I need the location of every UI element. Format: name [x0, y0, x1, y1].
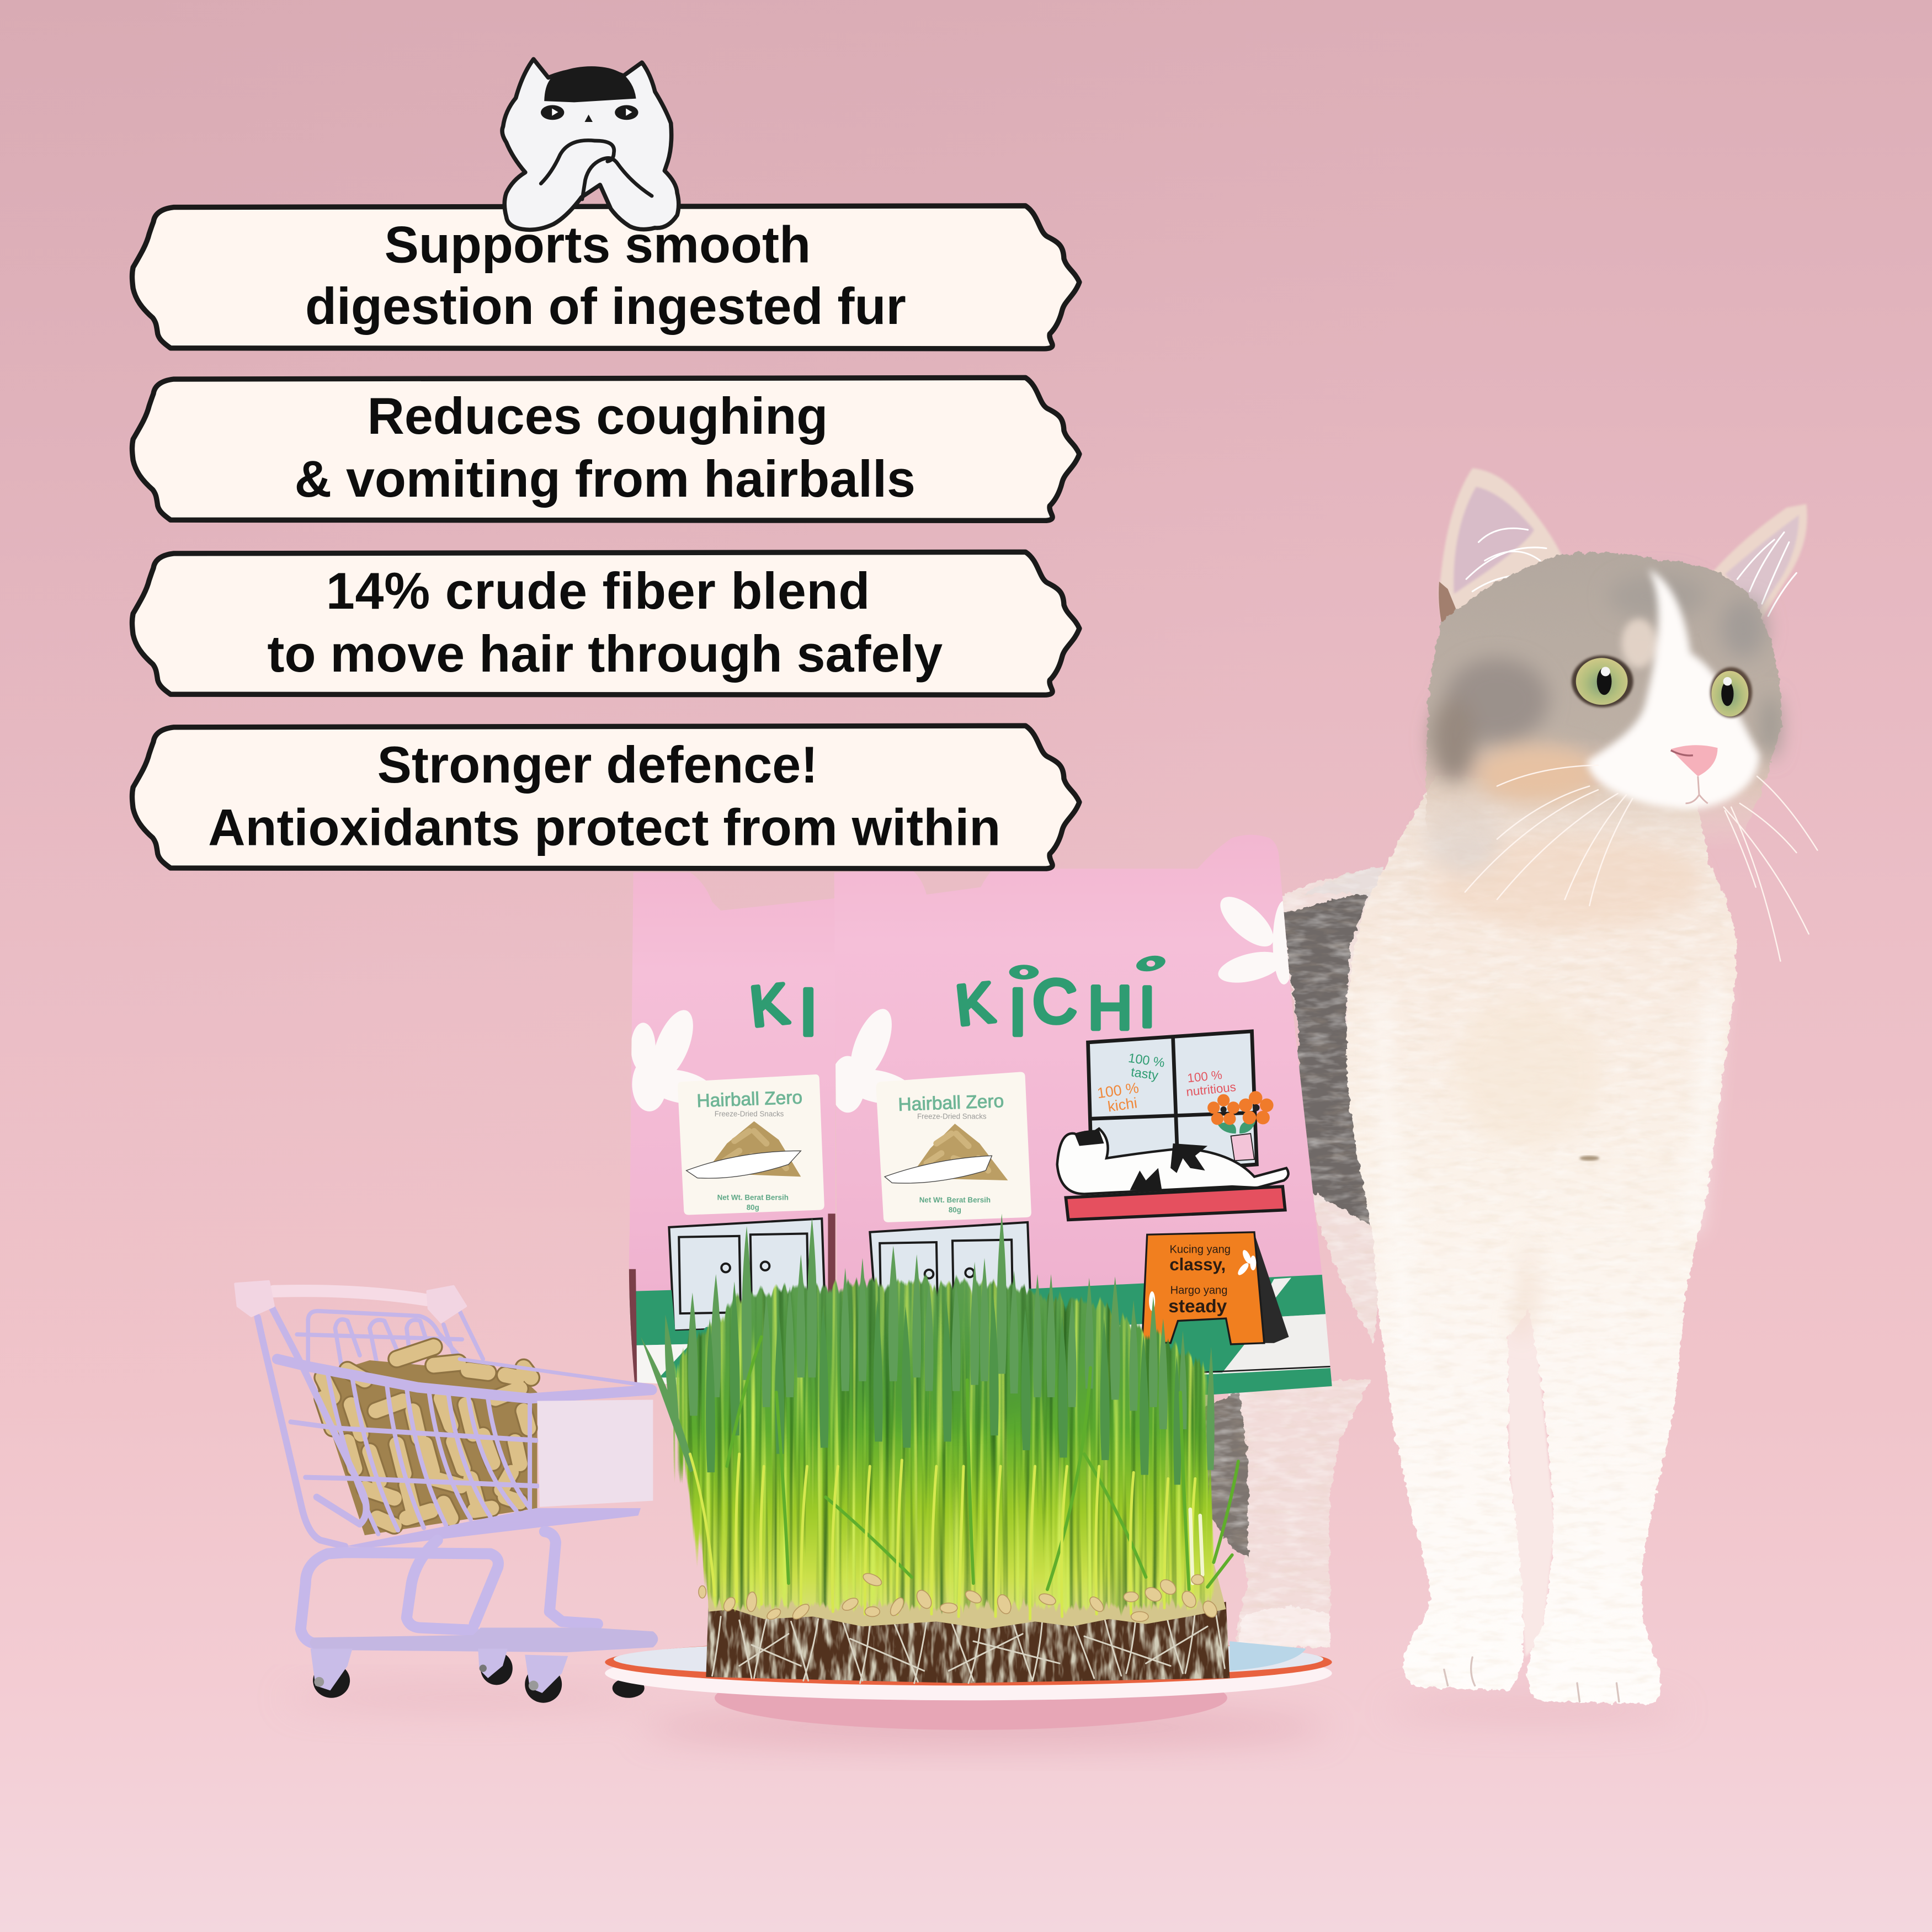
mascot body [502, 59, 679, 230]
benefit banner 2 [132, 377, 1079, 520]
window with claims: kichi [1106, 1094, 1138, 1115]
benefit text 4: Stronger defence! [377, 736, 818, 794]
cat photo [1197, 468, 1817, 1704]
front bag label: Hairball Zero [898, 1091, 1004, 1115]
mascot cat peeking over banner [502, 59, 679, 230]
cart base [310, 1628, 658, 1652]
cart back frame [297, 1311, 483, 1370]
cat grey back [1276, 866, 1386, 1343]
cart basket frame and bars [258, 1306, 652, 1546]
back bag label: Hairball Zero [696, 1087, 803, 1111]
cat whiskers [1465, 765, 1817, 961]
cat back leg [1197, 1379, 1371, 1647]
cat eyes [1572, 656, 1752, 718]
back bag label: 80g [747, 1204, 759, 1212]
window with claims: 100 % [1186, 1068, 1223, 1085]
grass leaf tips front [706, 1281, 1181, 1485]
back bag cabinet [669, 1218, 826, 1330]
front product bag [826, 826, 1343, 1404]
back product bag [622, 863, 838, 1404]
grass leaf tips back [641, 1214, 1215, 1472]
window with claims: nutritious [1185, 1080, 1237, 1099]
cart handle [235, 1281, 466, 1322]
cart legs [301, 1531, 598, 1644]
grass mass [616, 1183, 1281, 1651]
back bag edge [629, 1214, 838, 1386]
illustrated flowers [1207, 1091, 1274, 1161]
grass soil and roots [706, 1602, 1230, 1683]
cart wheels [311, 1648, 645, 1703]
floor shadows [284, 1688, 1682, 1747]
shopping cart [235, 1281, 658, 1703]
plate [605, 1639, 1332, 1730]
sandwich sign: classy, [1169, 1255, 1226, 1274]
cart snacks [323, 1346, 531, 1525]
mascot paws [541, 140, 652, 199]
grass seed band [707, 1562, 1226, 1629]
cart front panel [537, 1399, 653, 1507]
mascot nose [584, 115, 593, 122]
benefit banner 4 [132, 726, 1079, 869]
cat hind leg between front legs [1505, 1306, 1555, 1657]
sandwich sign: steady [1168, 1296, 1227, 1317]
cat paw toes [1444, 1657, 1619, 1701]
plate white rim [605, 1646, 1332, 1700]
illustrated cat lying [1057, 1129, 1289, 1194]
plate inner [614, 1640, 1323, 1678]
cat body [1346, 776, 1736, 1704]
cart snacks backing [314, 1360, 537, 1535]
plate blue pattern [1230, 1641, 1306, 1671]
sandwich sign [1142, 1232, 1289, 1344]
benefit banner 3 [132, 552, 1079, 695]
benefit text 2: & vomiting from hairballs [295, 450, 916, 508]
mascot eyes [541, 105, 638, 120]
grass root strands [712, 1607, 1225, 1683]
grass seeds [699, 1571, 1220, 1622]
benefit banner 1 [132, 206, 1079, 349]
cart basket bottom grid [345, 1508, 641, 1547]
benefit text 1: digestion of ingested fur [305, 278, 906, 335]
front bag flower left [831, 1003, 917, 1113]
window with claims: tasty [1130, 1065, 1159, 1083]
back bag flower [631, 1010, 706, 1111]
cat ears [1439, 468, 1807, 653]
front bag logo [953, 953, 1167, 1050]
back bag logo: I [799, 975, 817, 1050]
front bag label: Net Wt. Berat Bersih [919, 1196, 991, 1204]
plate base [715, 1666, 1227, 1730]
cat head [1426, 552, 1782, 850]
front bag logo: H [1088, 973, 1132, 1042]
benefit text 2: Reduces coughing [367, 387, 828, 445]
mascot hair [544, 66, 636, 102]
front bag label: Freeze-Dried Snacks [917, 1112, 987, 1120]
window with claims [1088, 1031, 1257, 1177]
back bag logo: K [747, 971, 791, 1039]
benefit text 4: Antioxidants protect from within [208, 799, 1000, 856]
cat belly crease [1579, 1156, 1599, 1161]
benefit text 3: 14% crude fiber blend [326, 562, 870, 620]
cat body shading [1367, 801, 1725, 1355]
front bag logo: K [953, 970, 997, 1037]
back bag floor [629, 1290, 704, 1345]
cat white blaze and muzzle [1587, 570, 1759, 809]
sandwich sign: Kucing yang [1169, 1244, 1231, 1256]
front bag flower right [1212, 888, 1295, 988]
plate orange rim [605, 1639, 1332, 1685]
sandwich sign: Hargo yang [1170, 1284, 1227, 1296]
benefit text 1: Supports smooth [385, 216, 811, 274]
window with claims: 100 % [1096, 1079, 1140, 1101]
back bag label: Net Wt. Berat Bersih [717, 1194, 789, 1202]
front bag floor stripes [838, 1274, 1337, 1404]
cat head markings [1431, 574, 1779, 802]
grass dark centre [850, 1344, 1047, 1428]
window with claims: 100 % [1127, 1051, 1165, 1070]
back bag label [678, 1074, 824, 1215]
illustrated red cushion [1066, 1186, 1285, 1220]
benefit text 3: to move hair through safely [267, 625, 943, 683]
back bag label: Freeze-Dried Snacks [715, 1110, 784, 1118]
grass bright stems [690, 1337, 1238, 1619]
front bag label [876, 1072, 1031, 1222]
front bag logo: C [1032, 967, 1077, 1036]
wheatgrass [616, 1183, 1281, 1683]
cat nose [1671, 745, 1717, 803]
front bag cabinet [870, 1222, 1031, 1333]
front bag label: 80g [949, 1206, 961, 1214]
front bag logo: I [1009, 975, 1027, 1050]
front bag logo: I [1139, 975, 1155, 1039]
